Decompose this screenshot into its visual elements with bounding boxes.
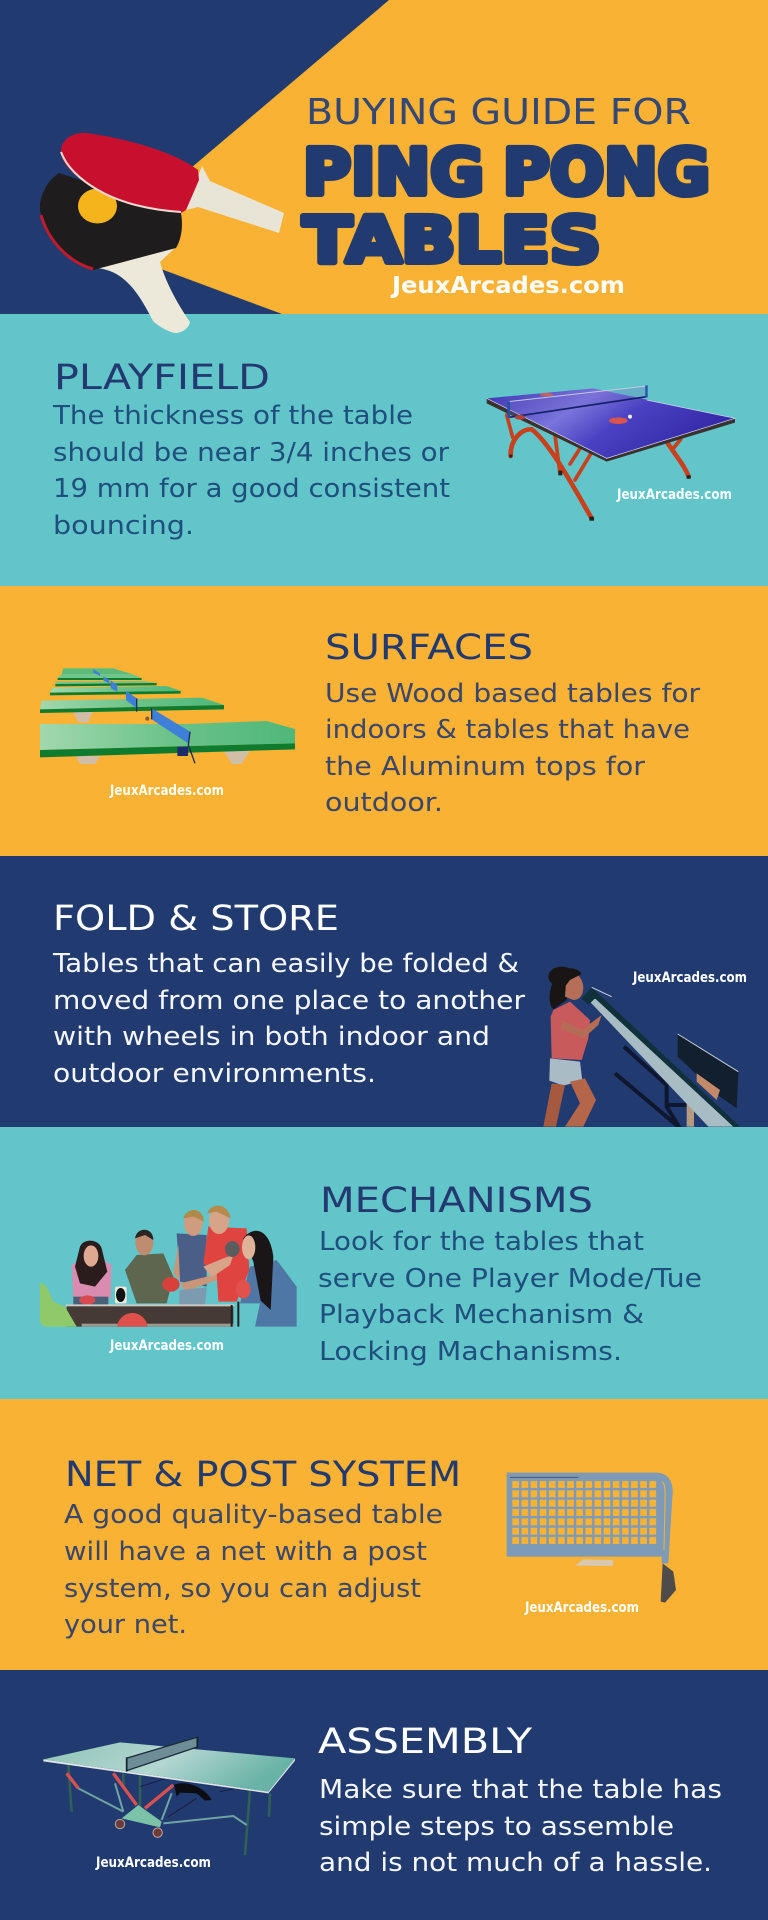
panel: playfield <box>0 314 768 586</box>
image: folding teal table on wheels <box>43 1737 295 1855</box>
text block: surfaces: indoors & tables that have <box>325 715 690 745</box>
text block: fold and store: Tables that can easily be folded & <box>52 949 519 979</box>
text block: mechanisms: Look for the tables that <box>319 1227 644 1257</box>
text block: fold and store: outdoor environments. <box>53 1059 376 1089</box>
text block: mechanisms: serve One Player Mode/Tue <box>318 1264 702 1294</box>
icon: ping pong paddles and ball <box>40 133 284 333</box>
heading: assembly: ASSEMBLY <box>318 1722 533 1762</box>
text block: mechanisms <box>318 1227 702 1367</box>
heading: mechanisms: MECHANISMS <box>320 1181 593 1221</box>
title: ping pong tables: TABLES <box>303 204 601 277</box>
text block: surfaces: the Aluminum tops for <box>325 752 645 782</box>
text block: assembly: Make sure that the table has <box>319 1775 722 1805</box>
text block: fold and store: with wheels in both indoor and <box>53 1022 490 1052</box>
text block: mechanisms: Playback Mechanism & <box>319 1300 644 1330</box>
text block: assembly <box>319 1775 722 1878</box>
text block: fold and store: moved from one place to another <box>53 986 525 1016</box>
panel: surfaces <box>0 586 768 856</box>
heading: fold and store: FOLD & STORE <box>53 899 339 939</box>
title: ping pong tables: PING <box>303 136 484 209</box>
heading: playfield: PLAYFIELD <box>54 358 270 398</box>
watermark: fold and store: JeuxArcades.com <box>632 970 747 986</box>
image: group of friends playing at a table <box>40 1206 297 1327</box>
text block: surfaces: Use Wood based tables for <box>325 679 700 709</box>
text block: assembly: and is not much of a hassle. <box>319 1848 712 1878</box>
panel: mechanisms <box>0 1127 768 1399</box>
title: buying guide for: BUYING GUIDE FOR <box>306 92 691 133</box>
text block: net and post system: will have a net with a post <box>64 1537 427 1567</box>
panel: assembly <box>0 1670 768 1920</box>
image: blue table tennis table <box>487 385 735 521</box>
panel: header <box>0 0 768 333</box>
text block: net and post system <box>64 1500 443 1640</box>
watermark: playfield: JeuxArcades.com <box>616 487 732 503</box>
text block: playfield <box>52 401 450 541</box>
text block: playfield: 19 mm for a good consistent <box>53 474 450 504</box>
text block: net and post system: A good quality-based table <box>64 1500 443 1530</box>
watermark: surfaces: JeuxArcades.com <box>109 783 224 799</box>
heading: net and post system: NET & POST SYSTEM <box>65 1455 461 1495</box>
panel: fold and store <box>52 904 746 1127</box>
heading: surfaces: SURFACES <box>325 628 533 668</box>
text block: fold and store <box>52 949 525 1089</box>
text block: playfield: The thickness of the table <box>52 401 413 431</box>
title: ping pong tables: PONG <box>503 136 710 209</box>
image: woman folding a table <box>543 967 740 1128</box>
text block: mechanisms: Locking Machanisms. <box>319 1337 622 1367</box>
text block: playfield: bouncing. <box>53 511 194 541</box>
brand: jeuxarcades.com: JeuxArcades.com <box>390 273 625 299</box>
title: ping pong tables <box>303 136 710 277</box>
text block: playfield: should be near 3/4 inches or <box>53 438 449 468</box>
text block: net and post system: system, so you can adjust <box>64 1574 421 1604</box>
watermark: assembly: JeuxArcades.com <box>95 1855 211 1871</box>
watermark: net and post system: JeuxArcades.com <box>524 1600 639 1616</box>
panel: net and post system <box>0 1399 768 1670</box>
image: net with post clamp <box>507 1473 676 1603</box>
text block: net and post system: your net. <box>64 1610 187 1640</box>
text block: surfaces: outdoor. <box>325 788 443 818</box>
image: row of green outdoor tables <box>40 668 295 764</box>
text block: surfaces <box>325 679 700 818</box>
text block: assembly: simple steps to assemble <box>319 1812 674 1842</box>
watermark: mechanisms: JeuxArcades.com <box>109 1338 224 1354</box>
